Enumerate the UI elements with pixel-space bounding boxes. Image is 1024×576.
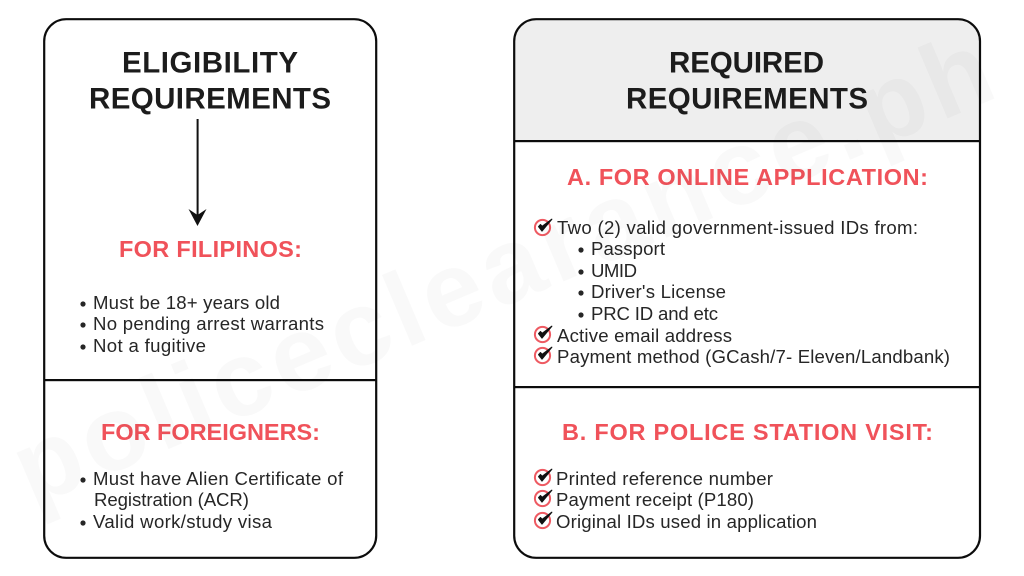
checklist: online application: PRC ID and etc	[591, 303, 718, 324]
panel: eligibility requirements	[44, 19, 376, 558]
list: foreigner criteria: Must have Alien Certificate of	[93, 468, 344, 489]
list: filipino criteria	[80, 292, 324, 356]
heading: for foreigners: FOR FOREIGNERS:	[101, 419, 320, 445]
checklist: online application: UMID	[591, 260, 637, 281]
list: foreigner criteria: Valid work/study visa	[93, 511, 273, 532]
list: foreigner criteria: Registration (ACR)	[94, 489, 249, 510]
title: required requirements: REQUIRED	[669, 46, 824, 80]
checklist: police station visit: Payment receipt (P180)	[556, 489, 754, 510]
list: filipino criteria: No pending arrest warrants	[93, 313, 324, 334]
title: eligibility requirements	[89, 46, 331, 116]
heading: police station visit: B. FOR POLICE STATION VISIT:	[562, 419, 933, 445]
checklist: online application: Two (2) valid government-issued IDs from:	[557, 217, 918, 238]
heading: for filipinos: FOR FILIPINOS:	[119, 236, 302, 262]
title: eligibility requirements: ELIGIBILITY	[122, 46, 298, 80]
watermark: policeclearance.ph	[0, 9, 1009, 528]
checklist: online application: Payment method (GCash/7- Eleven/Landbank)	[557, 346, 950, 367]
checklist: online application: Active email address	[557, 325, 732, 346]
arrow: down	[188, 119, 206, 226]
title: required requirements: REQUIREMENTS	[626, 82, 868, 116]
checklist: online application	[535, 217, 950, 367]
checklist: police station visit	[535, 468, 817, 532]
checklist: police station visit: Printed reference number	[556, 468, 773, 489]
checklist: online application: Driver's License	[591, 281, 726, 302]
panel: required requirements	[514, 19, 980, 558]
list: foreigner criteria	[80, 468, 344, 532]
header band	[514, 19, 980, 141]
checklist: police station visit: Original IDs used in application	[556, 511, 817, 532]
title: required requirements	[626, 46, 868, 116]
heading: online application: A. FOR ONLINE APPLICATION:	[567, 164, 928, 190]
list: filipino criteria: Must be 18+ years old	[93, 292, 280, 313]
title: eligibility requirements: REQUIREMENTS	[89, 82, 331, 116]
checklist: online application: Passport	[591, 238, 666, 259]
list: filipino criteria: Not a fugitive	[93, 335, 206, 356]
